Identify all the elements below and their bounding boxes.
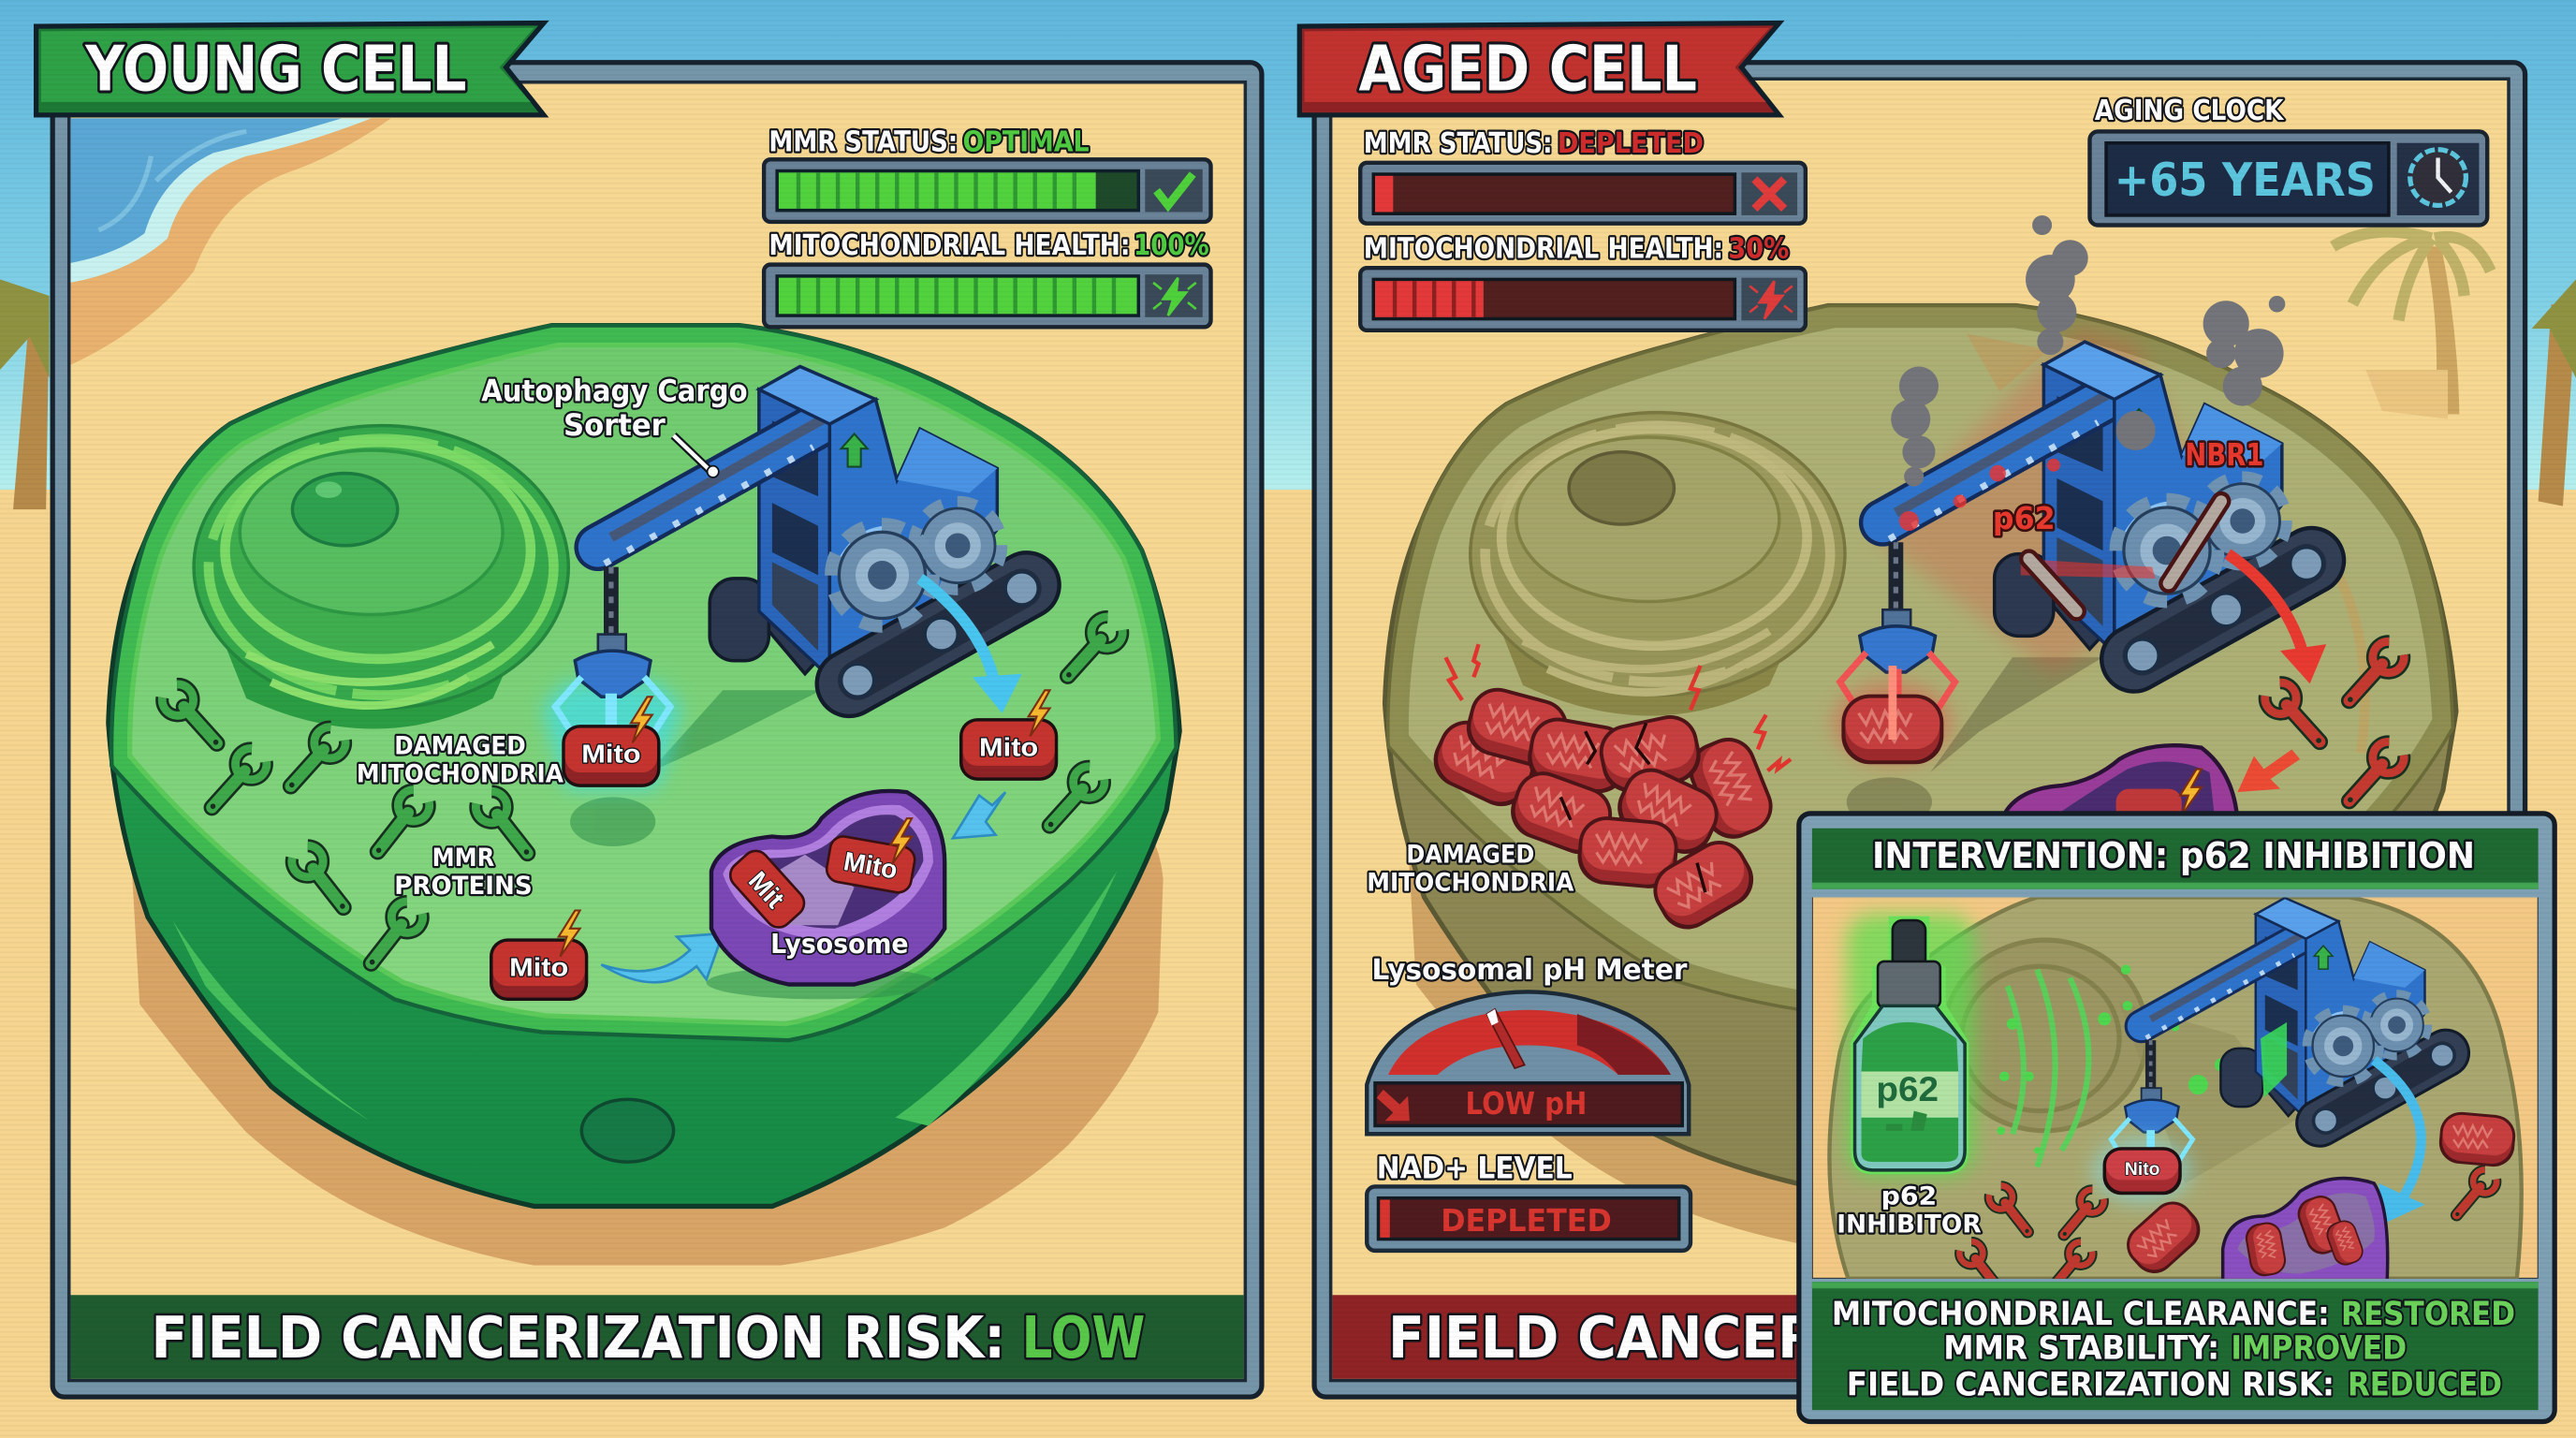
result: stability: MMR STABILITY: [1943, 1329, 2219, 1368]
right palm tree [2532, 279, 2576, 506]
mitochondrial health meter [764, 229, 1211, 327]
label: MMR proteins: PROTEINS [394, 873, 533, 901]
footer: low risk: LOW [1022, 1305, 1145, 1372]
label: NBR1: NBR1 [2185, 436, 2264, 473]
footer: aged risk (partly hidden) [1332, 1295, 1819, 1379]
result: risk: REDUCED [2348, 1365, 2502, 1403]
label: damaged mitochondria: MITOCHONDRIA [357, 761, 564, 789]
inset scene [1812, 896, 2539, 1296]
arrow: machine to mito [920, 579, 1022, 713]
MMR status meter [764, 125, 1211, 222]
red wrenches [1956, 1167, 2499, 1296]
mitochondrial health meter [1360, 233, 1806, 330]
label: damaged mitochondria: DAMAGED [1406, 842, 1534, 870]
banner: young cell [37, 23, 544, 115]
held damaged mito [1834, 666, 1952, 764]
label: damaged mitochondria [357, 733, 564, 789]
nucleus [194, 426, 568, 729]
green bottle: p62 [1876, 1070, 1939, 1108]
autophagy machine [542, 366, 1038, 789]
left palm tree [0, 279, 50, 509]
lysosomal pH meter: LOW pH [1466, 1085, 1587, 1122]
panel: aged cell [1314, 63, 2525, 1397]
cell body [109, 326, 1179, 1206]
mito held by claw: Mito [581, 740, 640, 769]
MMR status meter: MMR STATUS: [768, 125, 958, 159]
mitochondrial health meter: 30% [1728, 233, 1789, 266]
inset frame [1799, 814, 2554, 1421]
label: damaged mitochondria: DAMAGED [394, 733, 526, 761]
MMR status meter: DEPLETED [1558, 127, 1704, 160]
banner: aged cell: AGED CELL [1358, 33, 1697, 106]
label: autophagy cargo sorter: Sorter [564, 409, 666, 443]
lysosome label: Lysosome [770, 929, 909, 960]
label: autophagy cargo sorter [481, 374, 748, 477]
green bottle [1847, 914, 1975, 1177]
mito lower [490, 911, 588, 1001]
aging clock [2089, 95, 2487, 225]
green repair spark [2261, 1022, 2287, 1098]
damaged machine [1840, 329, 2323, 731]
inset results [1812, 1282, 2539, 1410]
panel: young cell [52, 63, 1262, 1397]
icon: check [1157, 174, 1193, 205]
mito in lysosome: Mit [743, 866, 790, 914]
footer: aged risk (partly hidden): FIELD CANCER [1388, 1305, 1819, 1372]
lysosomal pH meter: Lysosomal pH Meter [1372, 954, 1688, 987]
mito in lysosome: Mito [842, 846, 900, 885]
footer: low risk [70, 1295, 1244, 1379]
treated cell [1829, 897, 2522, 1279]
MMR status meter [1360, 127, 1806, 224]
smoke plumes [1891, 215, 2285, 487]
gauge needle [1486, 1009, 1525, 1068]
held mito: Nito [2125, 1160, 2160, 1180]
mitochondrial health meter: 100% [1134, 229, 1209, 262]
mito right: Mito [979, 732, 1038, 761]
shadows under items [570, 690, 936, 999]
mito in lysosome [825, 834, 916, 894]
label: p62 inhibitor: INHIBITOR [1837, 1211, 1982, 1240]
aged lysosome [2003, 743, 2239, 811]
inset heading: INTERVENTION: p62 INHIBITION [1872, 835, 2475, 877]
result: risk: FIELD CANCERIZATION RISK: [1847, 1365, 2334, 1403]
mito in lysosome [724, 845, 810, 932]
NAD+ level meter: NAD+ LEVEL [1377, 1152, 1573, 1186]
icon: clock [2410, 150, 2466, 205]
MMR status meter: OPTIMAL [962, 125, 1090, 159]
label: p62: p62 [1993, 500, 2056, 536]
jamming wrench NBR1 [2169, 501, 2221, 583]
label: MMR proteins: MMR [432, 844, 494, 873]
aged shadows [1846, 657, 2100, 811]
label: MMR proteins [394, 844, 533, 901]
inhibitor waves [2008, 970, 2088, 1167]
aging clock: AGING CLOCK [2095, 95, 2285, 127]
blue arrow [2374, 1060, 2425, 1225]
red arrow [2228, 554, 2326, 683]
banner: aged cell [1299, 23, 1779, 115]
MMR status meter: MMR STATUS: [1364, 127, 1553, 160]
icon: cross [1754, 179, 1784, 209]
panel frame [1314, 63, 2525, 1397]
mitochondrial health meter: MITOCHONDRIAL HEALTH: [1364, 233, 1723, 266]
NAD+ level meter [1367, 1152, 1690, 1251]
aged wrenches [2261, 638, 2408, 812]
mitochondria in scene [2118, 1110, 2517, 1282]
inhibitor particles [1997, 964, 2228, 1153]
aging clock: +65 YEARS [2115, 153, 2376, 207]
lysosome [711, 791, 944, 985]
arrow: mito to lysosome [953, 792, 1005, 838]
cell shadow [131, 829, 1164, 1266]
icon: energy bolt [1153, 278, 1196, 315]
banner: young cell: YOUNG CELL [84, 33, 466, 106]
held mito [2093, 1137, 2191, 1203]
jamming wrench p62 [2029, 559, 2076, 611]
label: damaged mitochondria [1367, 842, 1574, 897]
repaired machine [2111, 898, 2454, 1174]
icon: MMR protein wrenches [158, 613, 1127, 974]
damaged mitochondria cluster [1425, 644, 1791, 939]
red fault glow [1899, 459, 2156, 579]
result: stability [1943, 1329, 2407, 1368]
inset lysosome [2223, 1179, 2388, 1282]
lysosomal pH meter [1367, 954, 1689, 1134]
cell pore [581, 1099, 674, 1162]
result: clearance: MITOCHONDRIAL CLEARANCE: [1832, 1295, 2330, 1333]
aged cell [1385, 306, 2456, 1246]
mitochondrial health meter: MITOCHONDRIAL HEALTH: [768, 229, 1131, 262]
NAD+ level meter: DEPLETED [1441, 1202, 1612, 1239]
panel: intervention inset [1799, 814, 2554, 1421]
result: stability: IMPROVED [2231, 1329, 2407, 1368]
footer: low risk: FIELD CANCERIZATION RISK: [151, 1305, 1005, 1372]
arrow: lower mito to lysosome [601, 933, 723, 982]
background palm [2333, 232, 2491, 419]
label: p62 inhibitor [1837, 1183, 1982, 1240]
mito lower: Mito [509, 953, 568, 982]
ocean corner [70, 118, 391, 365]
icon: failing bolt [1749, 281, 1793, 319]
result: clearance: RESTORED [2341, 1295, 2515, 1333]
label: p62 inhibitor: p62 [1881, 1183, 1937, 1211]
panel frame [52, 63, 1262, 1397]
label: damaged mitochondria: MITOCHONDRIA [1367, 869, 1574, 897]
red block arrow [2237, 749, 2300, 792]
aged nucleus [1471, 413, 1845, 715]
mito held by claw [562, 697, 661, 787]
label: autophagy cargo sorter: Autophagy Cargo [481, 374, 748, 408]
inset heading [1812, 829, 2539, 889]
mito right [959, 690, 1058, 781]
